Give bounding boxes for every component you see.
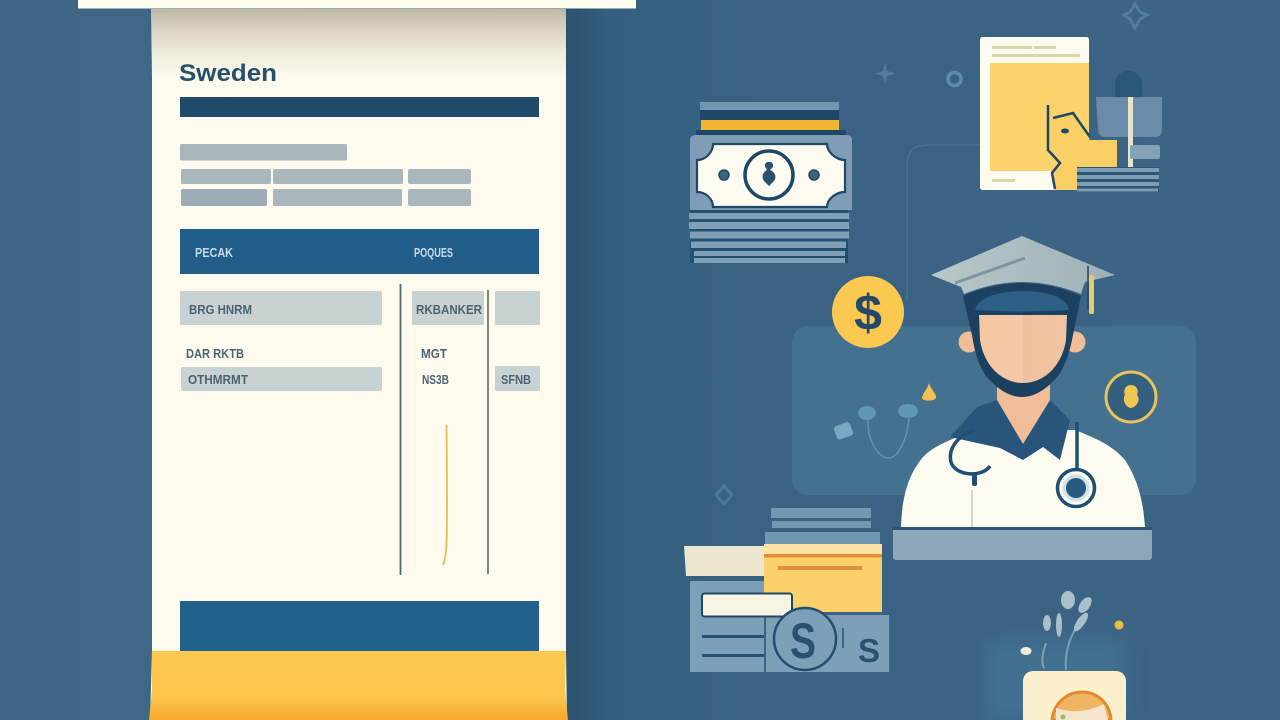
cap band (975, 291, 1069, 312)
heading: Sweden: Sweden (179, 60, 277, 87)
neck (997, 385, 1050, 445)
table rows: NS3B (422, 372, 449, 387)
collar (950, 400, 1070, 460)
top feed slot (78, 0, 636, 8)
paper fold shading (151, 9, 566, 78)
icon: small ring (948, 72, 961, 86)
footer bar (180, 601, 539, 651)
icon: folder and coin stack (684, 508, 889, 672)
table rows (180, 291, 540, 391)
ears (958, 332, 980, 352)
icon: faint stethoscope (833, 383, 936, 458)
icon: sparkle (874, 62, 896, 85)
gown shoulders (901, 430, 1145, 527)
icon: folder and coin stack: S (858, 632, 880, 669)
icon: laptop base (893, 527, 1152, 560)
table rows: OTHMRMT (188, 372, 248, 387)
table rows: BRG HNRM (189, 302, 252, 317)
table rows: RKBANKER (416, 302, 483, 317)
icon: banknote stack (689, 102, 852, 263)
panel: figure backdrop (792, 326, 1196, 495)
placket seam (971, 490, 973, 527)
icon: dollar coin: $ (854, 285, 882, 341)
table rows: SFNB (501, 372, 531, 387)
tassel (1087, 266, 1089, 310)
table header (180, 229, 539, 274)
table rows: MGT (421, 346, 447, 361)
title bar (180, 97, 539, 117)
icon: dollar coin (832, 276, 904, 348)
table rows: DAR RKTB (186, 346, 244, 361)
footer yellow band (149, 651, 568, 720)
hair and beard (963, 283, 1081, 397)
panel: receipt document (78, 0, 636, 720)
paper sheet (150, 9, 567, 720)
icon: small diamond (716, 486, 732, 504)
icon: plant with food tile (985, 591, 1126, 720)
table header: POQUES (414, 245, 453, 260)
connector line (907, 145, 980, 300)
mortarboard (931, 236, 1115, 294)
icon: document with bag and hand (980, 37, 1162, 192)
figure: graduate doctor (901, 236, 1145, 527)
placeholder info lines (180, 144, 471, 206)
icon: diamond sparkle (1124, 4, 1147, 28)
icon: folder and coin stack: S (790, 613, 816, 669)
column rules (400, 284, 488, 575)
stethoscope (950, 422, 1094, 506)
face (979, 315, 1067, 383)
table header: PECAK (195, 245, 234, 260)
icon: outlined coin (1106, 372, 1156, 422)
